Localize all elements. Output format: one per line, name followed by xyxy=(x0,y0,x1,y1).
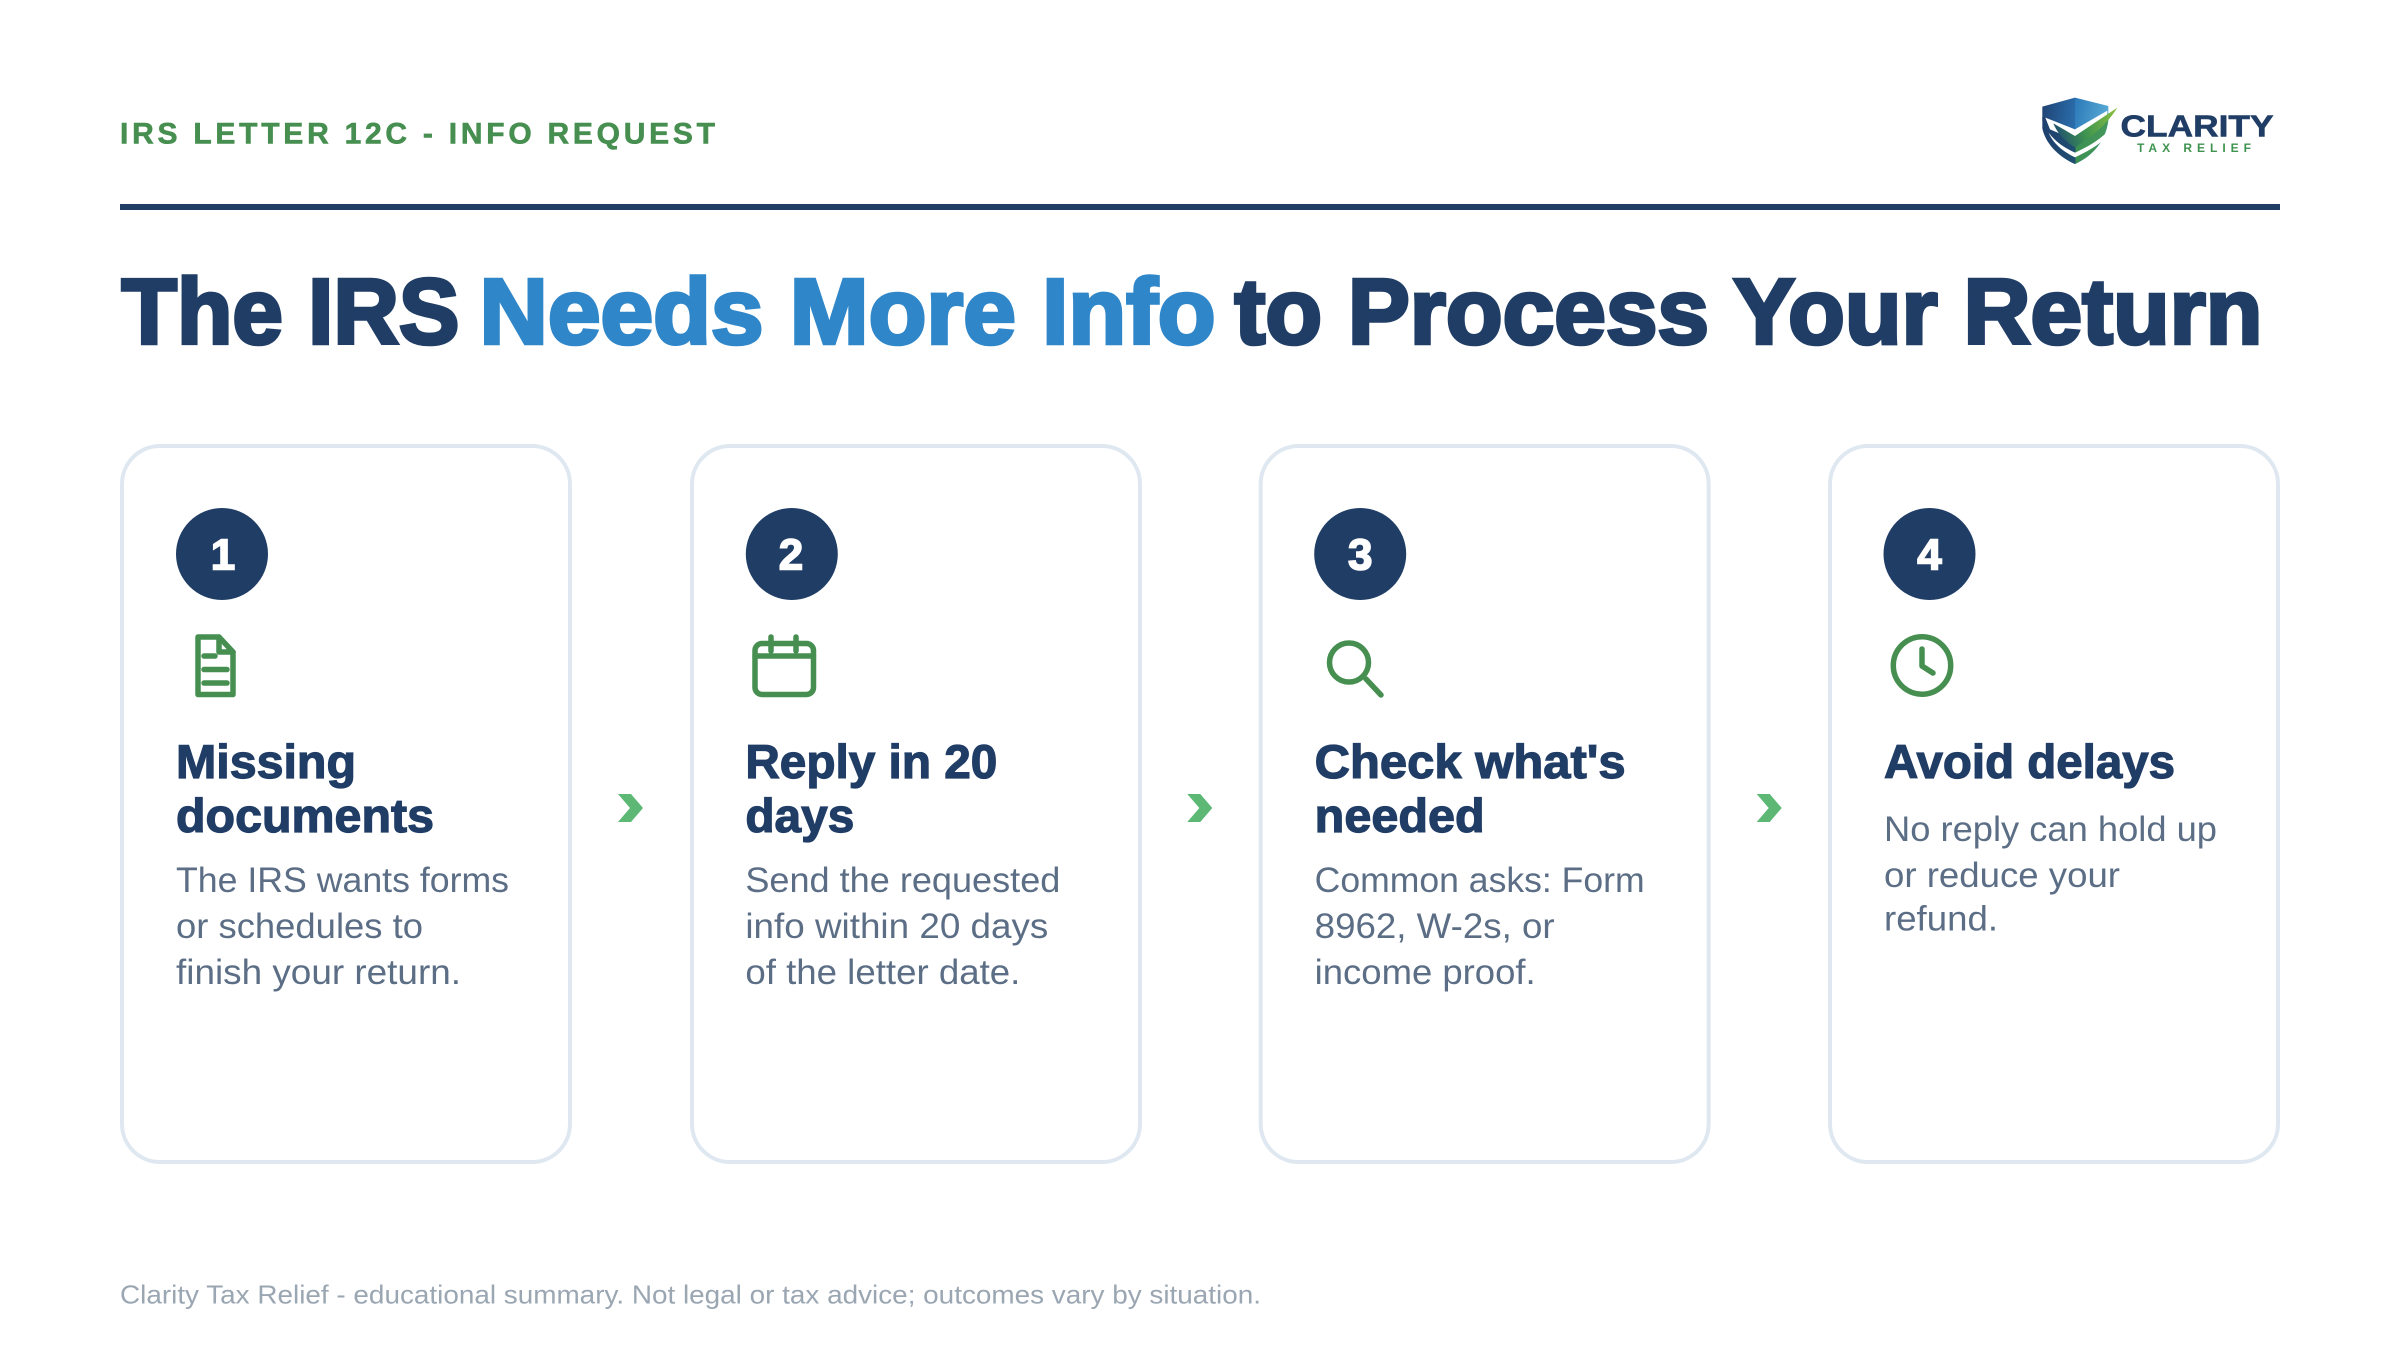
step 2 description xyxy=(745,861,1060,992)
arrow 1 xyxy=(618,794,643,822)
step 3 description: income proof. xyxy=(1315,953,1536,992)
step 3 description: 8962, W-2s, or xyxy=(1315,907,1555,946)
step 1 description: finish your return. xyxy=(176,953,461,992)
step 1 description: The IRS wants forms xyxy=(176,861,509,900)
title xyxy=(122,260,2262,364)
step 3 heading: Check what's xyxy=(1315,735,1626,788)
icon: shield with check xyxy=(2042,98,2117,164)
eyebrow label: IRS LETTER 12C - INFO REQUEST xyxy=(120,118,715,150)
arrow 2 xyxy=(1187,794,1212,822)
panel: step 3 check what's needed xyxy=(1261,446,1709,1162)
panel: step 4 avoid delays xyxy=(1830,446,2278,1162)
logo wordmark: CLARITY xyxy=(2120,108,2274,144)
step 3 heading xyxy=(1315,735,1626,842)
step number 1 xyxy=(176,508,268,600)
step 1 description xyxy=(176,861,509,992)
step 4 description xyxy=(1884,810,2217,938)
step 2 description: Send the requested xyxy=(745,861,1060,900)
step 3 heading: needed xyxy=(1315,789,1485,842)
step 2 description: info within 20 days xyxy=(745,907,1048,946)
icon: document xyxy=(198,637,233,694)
icon: calendar xyxy=(755,637,814,694)
step 4 description: refund. xyxy=(1884,900,1998,938)
step number 1: 1 xyxy=(211,530,235,580)
panel: step 1 missing documents xyxy=(122,446,570,1162)
step 2 heading: Reply in 20 xyxy=(745,735,997,788)
step number 3 xyxy=(1314,508,1406,600)
step 1 heading: documents xyxy=(176,789,434,842)
step 2 heading: days xyxy=(745,789,854,842)
step 2 heading xyxy=(745,735,997,842)
step 1 heading: Missing xyxy=(176,735,356,788)
step number 4 xyxy=(1884,508,1976,600)
title highlight: Needs More Info xyxy=(480,260,1216,364)
step number 3: 3 xyxy=(1348,530,1372,580)
step number 2 xyxy=(746,508,838,600)
title ending: to Process Your Return xyxy=(1234,260,2262,364)
logo tagline: TAX RELIEF xyxy=(2137,141,2251,155)
step 1 heading xyxy=(176,735,434,842)
panel: step 2 reply in 20 days xyxy=(692,446,1140,1162)
footer disclaimer: Clarity Tax Relief - educational summary. Not legal or tax advice; outcomes vary by situation. xyxy=(120,1280,1261,1310)
step 1 description: or schedules to xyxy=(176,907,423,946)
icon: clock xyxy=(1893,637,1951,694)
step number 4: 4 xyxy=(1917,530,1942,580)
arrow 3 xyxy=(1757,794,1782,822)
title: The IRS xyxy=(122,260,460,364)
step 4 description: No reply can hold up xyxy=(1884,810,2217,849)
logo: Clarity Tax Relief xyxy=(2042,98,2274,164)
step 3 description: Common asks: Form xyxy=(1315,861,1645,900)
step number 2: 2 xyxy=(779,530,803,580)
step 2 description: of the letter date. xyxy=(745,953,1020,992)
step 4 heading: Avoid delays xyxy=(1884,735,2175,788)
step 4 description: or reduce your xyxy=(1884,856,2120,895)
step 3 description xyxy=(1315,861,1645,992)
icon: magnifying glass xyxy=(1330,643,1381,695)
